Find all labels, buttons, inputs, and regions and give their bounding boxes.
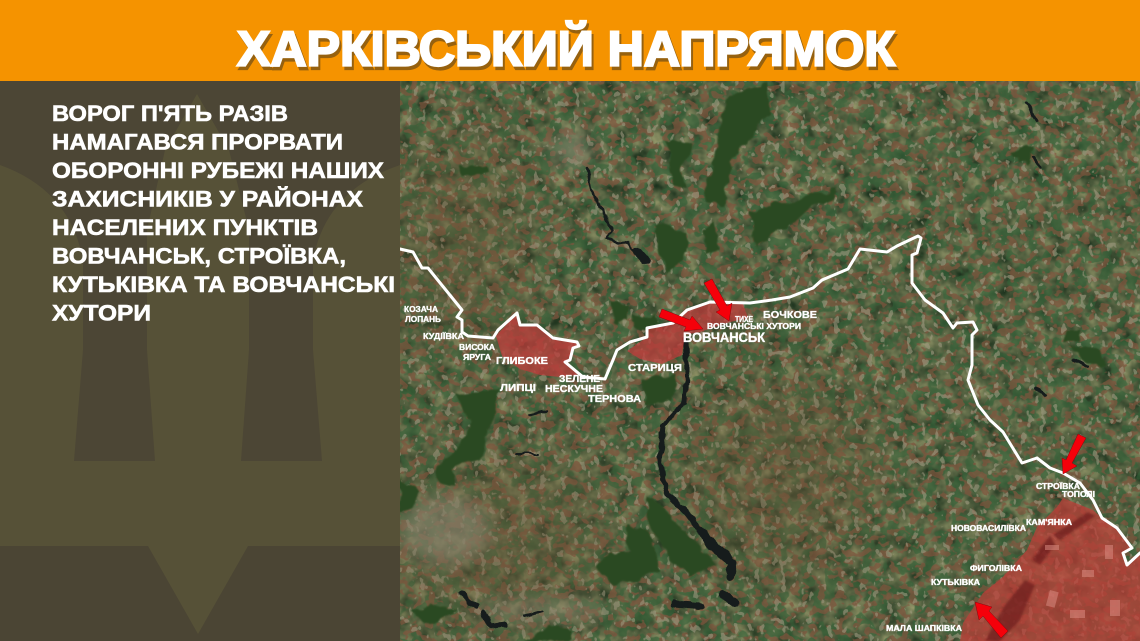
warm farmland tint (390, 130, 870, 630)
settlement labels: ГЛИБОКЕ (496, 355, 548, 367)
arrow: Vovchanski Khutory (704, 279, 732, 321)
body text: ЗАХИСНИКІВ У РАЙОНАХ (52, 186, 363, 212)
body text (52, 101, 395, 326)
urban areas (400, 132, 610, 619)
settlement labels: КУДІЇВКА (423, 331, 464, 341)
body text: НАМАГАВСЯ ПРОРВАТИ (52, 130, 343, 154)
river and reservoirs (462, 104, 1088, 626)
body text: НАСЕЛЕНИХ ПУНКТІВ (52, 215, 318, 240)
settlement labels: СТАРИЦЯ (628, 362, 682, 374)
settlement labels: ЛОПАНЬ (405, 314, 441, 324)
header band (0, 0, 1140, 81)
body text: КУТЬКІВКА ТА ВОВЧАНСЬКІ (52, 272, 395, 297)
title: ХАРКІВСЬКИЙ НАПРЯМОК (237, 22, 895, 76)
settlement labels: МАЛА ШАПКІВКА (886, 624, 962, 633)
settlement labels: ТЕРНОВА (588, 393, 641, 405)
settlement labels: СТРОЇВКА (1036, 482, 1080, 491)
settlement labels: БОЧКОВЕ (763, 309, 817, 321)
settlement labels: КАМ'ЯНКА (1026, 518, 1072, 527)
body text: ОБОРОННІ РУБЕЖІ НАШИХ (52, 158, 384, 183)
settlement labels: ТОПОЛІ (1062, 490, 1095, 499)
arrow: Stroivka (1062, 434, 1086, 474)
trident watermark (0, 81, 400, 634)
satellite map (390, 81, 1140, 641)
title shadow: ХАРКІВСЬКИЙ НАПРЯМОК (239, 25, 897, 80)
occupied area: Hlyboke (496, 313, 579, 377)
settlement labels: ЛИПЦІ (500, 382, 536, 394)
settlement labels (404, 304, 1095, 633)
settlement labels: ВОВЧАНСЬКІ ХУТОРИ (707, 322, 801, 331)
settlement labels: КОЗАЧА (404, 304, 438, 314)
settlement labels: ВОВЧАНСЬК (683, 330, 766, 345)
arrow: Vovchansk (659, 309, 703, 331)
body text: ВОРОГ П'ЯТЬ РАЗІВ (52, 101, 288, 126)
settlement labels: ФИГОЛІВКА (970, 564, 1022, 573)
settlement labels: ЗЕЛЕНЕ (559, 374, 600, 385)
front line (400, 236, 1140, 565)
settlement labels: ТИХЕ (735, 315, 754, 324)
occupied area: Vovchansk (627, 302, 748, 364)
body text: ВОВЧАНСЬК, СТРОЇВКА, (52, 244, 346, 268)
left panel (0, 81, 400, 641)
body text: ХУТОРИ (52, 300, 151, 326)
settlement labels: ВИСОКА (459, 342, 495, 352)
attack arrows (659, 279, 1086, 638)
occupied area: south-east (960, 498, 1140, 641)
arrow: Kutkivka (975, 602, 1008, 638)
settlement labels: КУТЬКІВКА (931, 578, 980, 587)
settlement labels: ЯРУГА (463, 352, 491, 362)
settlement labels: НЕСКУЧНЕ (545, 384, 603, 395)
settlement labels: НОВОВАСИЛІВКА (951, 524, 1026, 533)
forests (400, 84, 1107, 641)
